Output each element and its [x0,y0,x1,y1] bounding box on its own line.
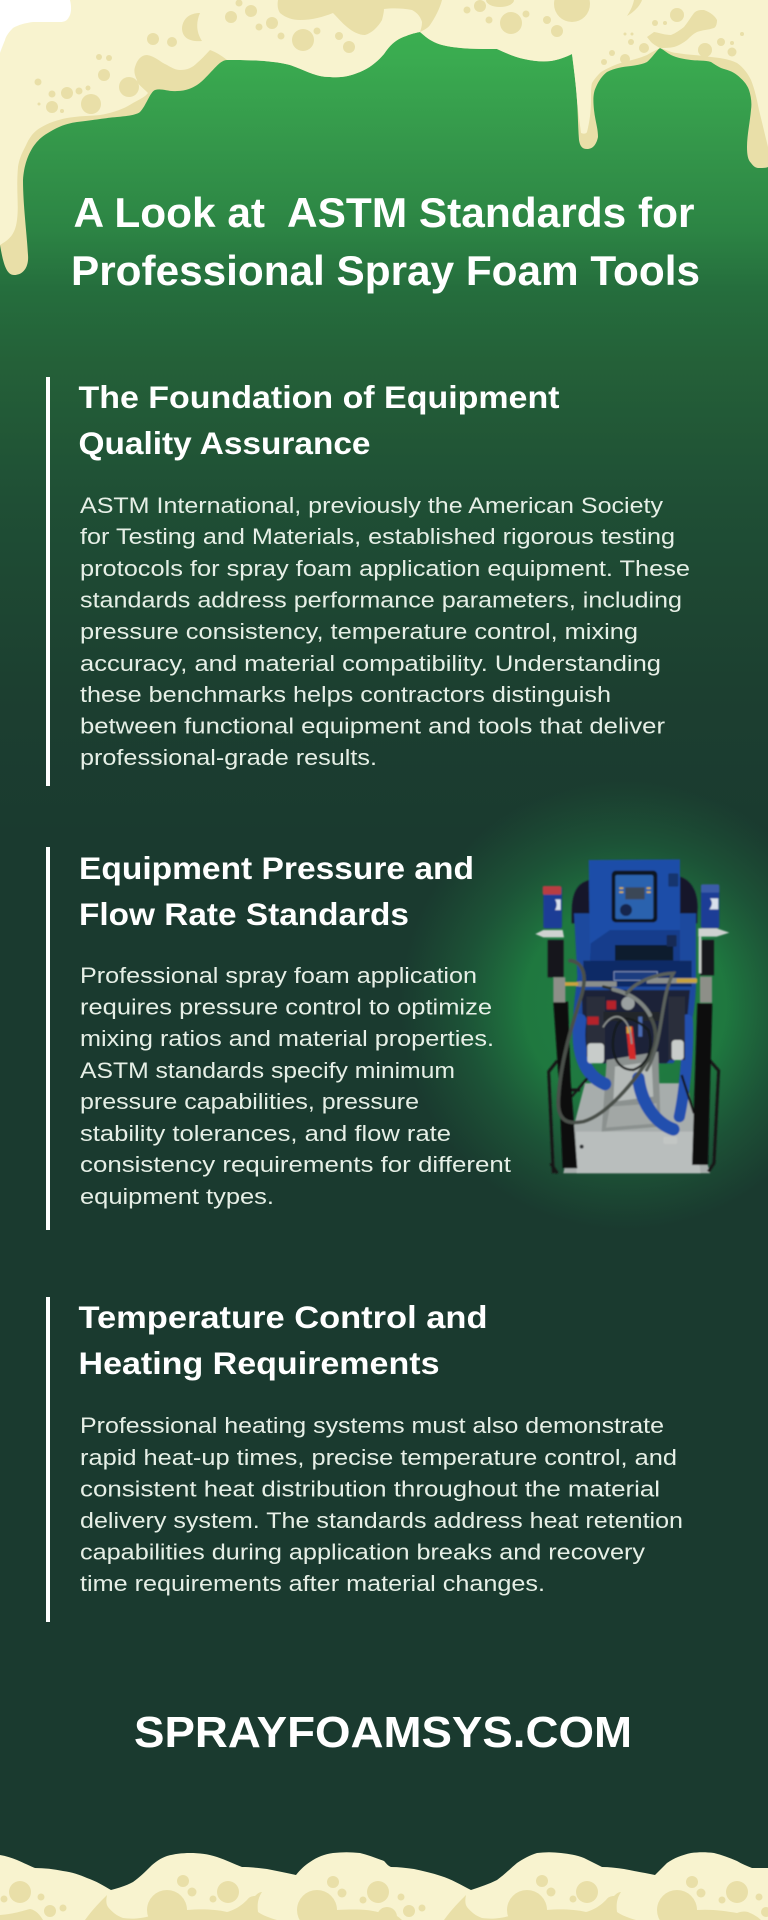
foam light layer [0,0,768,245]
body text: pressure capabilities, pressure [80,1089,419,1114]
body text: Professional heating systems must also demonstrate [80,1413,664,1438]
body text: standards address performance parameters, including [80,588,682,612]
blue hoses [579,1020,688,1129]
heading: Equipment Pressure and [79,850,474,886]
white corner [0,0,71,53]
heading [78,1299,488,1381]
heading: Flow Rate Standards [79,896,409,932]
body text: consistent heat distribution throughout the material [80,1476,660,1502]
body text: rapid heat-up times, precise temperature control, and [80,1445,677,1470]
panel: equipment pressure and flow rate standards [46,847,512,1230]
body text: Professional spray foam application [80,963,477,988]
manifold bar [578,981,697,984]
dark machine internals [582,990,690,1063]
central gauges and valves [587,997,685,1063]
foam body [0,1852,768,1920]
body text: between functional equipment and tools that deliver [80,714,666,738]
body text [80,493,690,770]
title: A Look at ASTM Standards for [74,189,694,236]
body text: consistency requirements for different [80,1152,512,1177]
heading: Quality Assurance [78,425,370,461]
panel: foundation of equipment quality assurance [46,377,690,786]
body text: pressure consistency, temperature control, mixing [80,619,638,644]
top foam border [0,0,768,275]
body text: capabilities during application breaks and recovery [80,1540,646,1564]
control box [589,859,680,961]
heading: Temperature Control and [78,1299,488,1335]
left pump canister [535,886,564,937]
body text: delivery system. The standards address heat retention [80,1508,683,1533]
accent bar [46,1297,50,1622]
foam dark top patches [182,0,717,48]
label band [583,961,692,987]
body text: mixing ratios and material properties. [80,1026,494,1051]
heading: Heating Requirements [78,1345,440,1381]
foam lower shadow [0,1890,761,1920]
left frame [549,1061,580,1173]
machine rear shoulders [572,877,698,923]
body text: accuracy, and material compatibility. Understanding [80,651,661,676]
right frame [708,1060,719,1172]
heading [79,850,474,932]
title: Professional Spray Foam Tools [71,247,700,294]
body text: for Testing and Materials, established rigorous testing [80,524,675,549]
body text: stability tolerances, and flow rate [80,1121,451,1146]
red and yellow handle [626,1027,636,1059]
bottom foam border [0,1852,768,1920]
black and gray cables [558,961,673,1123]
base plate bolts [580,1145,584,1149]
body text: equipment types. [80,1184,274,1209]
foam bubbles [0,1875,768,1920]
heading [78,379,560,461]
machine blue body [573,913,696,1063]
body text: professional-grade results. [80,745,377,770]
accent bar [46,377,50,786]
body text: ASTM standards specify minimum [80,1058,455,1083]
left post [553,1002,577,1168]
body text: requires pressure control to optimize [80,994,492,1020]
body text [80,1413,683,1596]
foam bubbles [34,0,744,114]
body text: ASTM International, previously the American Society [80,493,664,518]
body text [80,963,512,1209]
body text: time requirements after material changes. [80,1571,545,1596]
website url: SPRAYFOAMSYS.COM [134,1708,632,1757]
right pump canister [698,884,729,973]
right post [692,1003,712,1165]
accent bar [46,847,50,1230]
icon: spray foam proportioner machine [535,859,729,1173]
title [71,189,700,294]
heading: The Foundation of Equipment [78,379,560,415]
background glow behind equipment [390,770,768,1240]
silver heater box [602,1052,661,1132]
body text: these benchmarks helps contractors distinguish [80,682,611,707]
diamond plate base [563,1083,710,1173]
foam shadow layer [0,0,768,275]
body text: protocols for spray foam application equipment. These [80,556,690,581]
panel: temperature control and heating requirements [46,1297,683,1622]
